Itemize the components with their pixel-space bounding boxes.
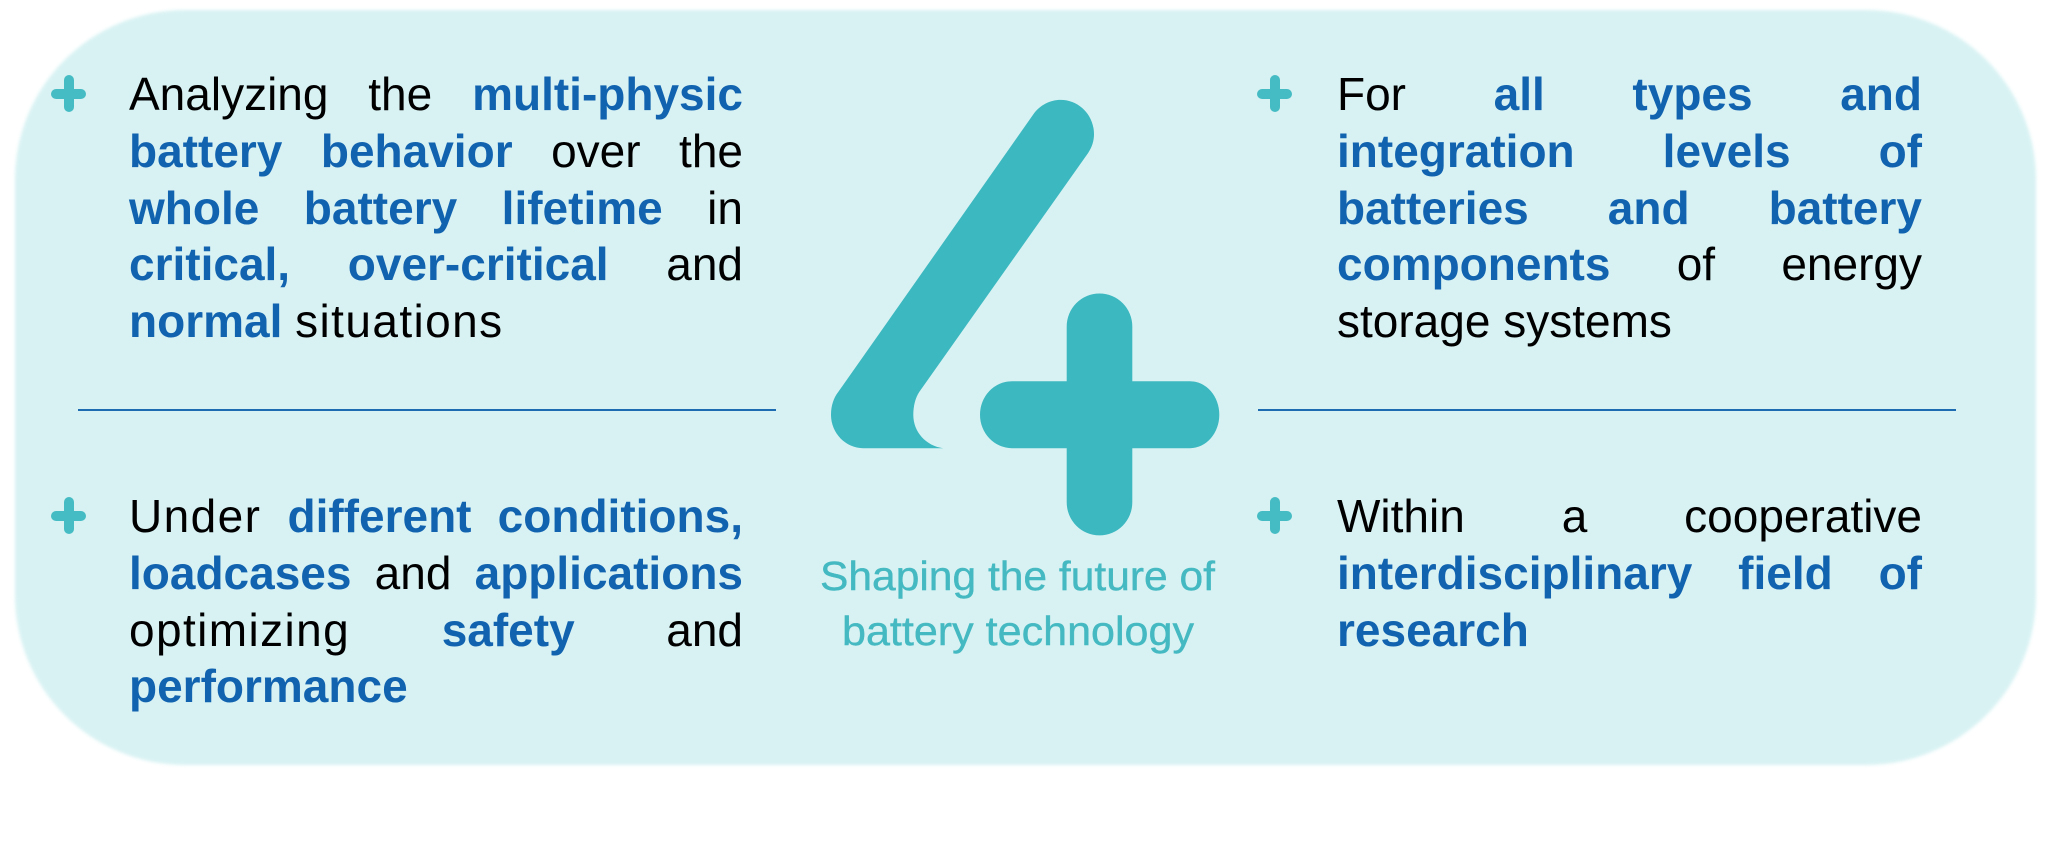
text block: multi-physic behavior: critical, over-critical and <box>129 238 743 290</box>
text block: all types and integration levels: storage systems <box>1337 295 1672 347</box>
text block: cooperative interdisciplinary research <box>1337 490 1922 656</box>
tagline: Shaping the future of <box>820 553 1216 599</box>
text block: multi-physic behavior: battery behavior over the <box>129 125 743 177</box>
text block: all types and integration levels: components of energy <box>1337 238 1922 290</box>
text block: multi-physic behavior <box>128 68 743 347</box>
icon: plus bullet bottom left <box>51 497 86 534</box>
text block: cooperative interdisciplinary research: research <box>1337 604 1529 656</box>
text block: multi-physic behavior: whole battery lifetime in <box>129 182 743 234</box>
icon: plus bullet top right <box>1257 75 1292 112</box>
text block: all types and integration levels: For all types and <box>1337 68 1922 120</box>
divider: right <box>1258 409 1956 410</box>
text block: multi-physic behavior: Analyzing the multi-physic <box>129 68 743 120</box>
text block: conditions and loadcases: optimizing safety and <box>129 604 743 656</box>
text block: conditions and loadcases <box>129 490 743 712</box>
icon: slanted stroke of the 4 <box>831 100 1094 448</box>
text block: all types and integration levels: batteries and battery <box>1337 182 1922 234</box>
icon: large plus of the 4 <box>980 293 1219 535</box>
text block: multi-physic behavior: normal situations <box>129 295 504 347</box>
icon: plus bullet top left <box>51 75 86 112</box>
tagline: battery technology <box>842 608 1195 654</box>
text block: cooperative interdisciplinary research: interdisciplinary field of <box>1337 547 1922 599</box>
tagline <box>820 553 1216 654</box>
text block: conditions and loadcases: performance <box>129 660 408 712</box>
text block: conditions and loadcases: loadcases and applications <box>129 547 743 599</box>
text block: cooperative interdisciplinary research: Within a cooperative <box>1337 490 1922 542</box>
text block: all types and integration levels: integration levels of <box>1337 125 1922 177</box>
text block: all types and integration levels <box>1337 68 1922 347</box>
text block: conditions and loadcases: Under different conditions, <box>129 490 743 542</box>
divider: left <box>78 409 776 410</box>
icon: plus bullet bottom right <box>1257 497 1292 534</box>
